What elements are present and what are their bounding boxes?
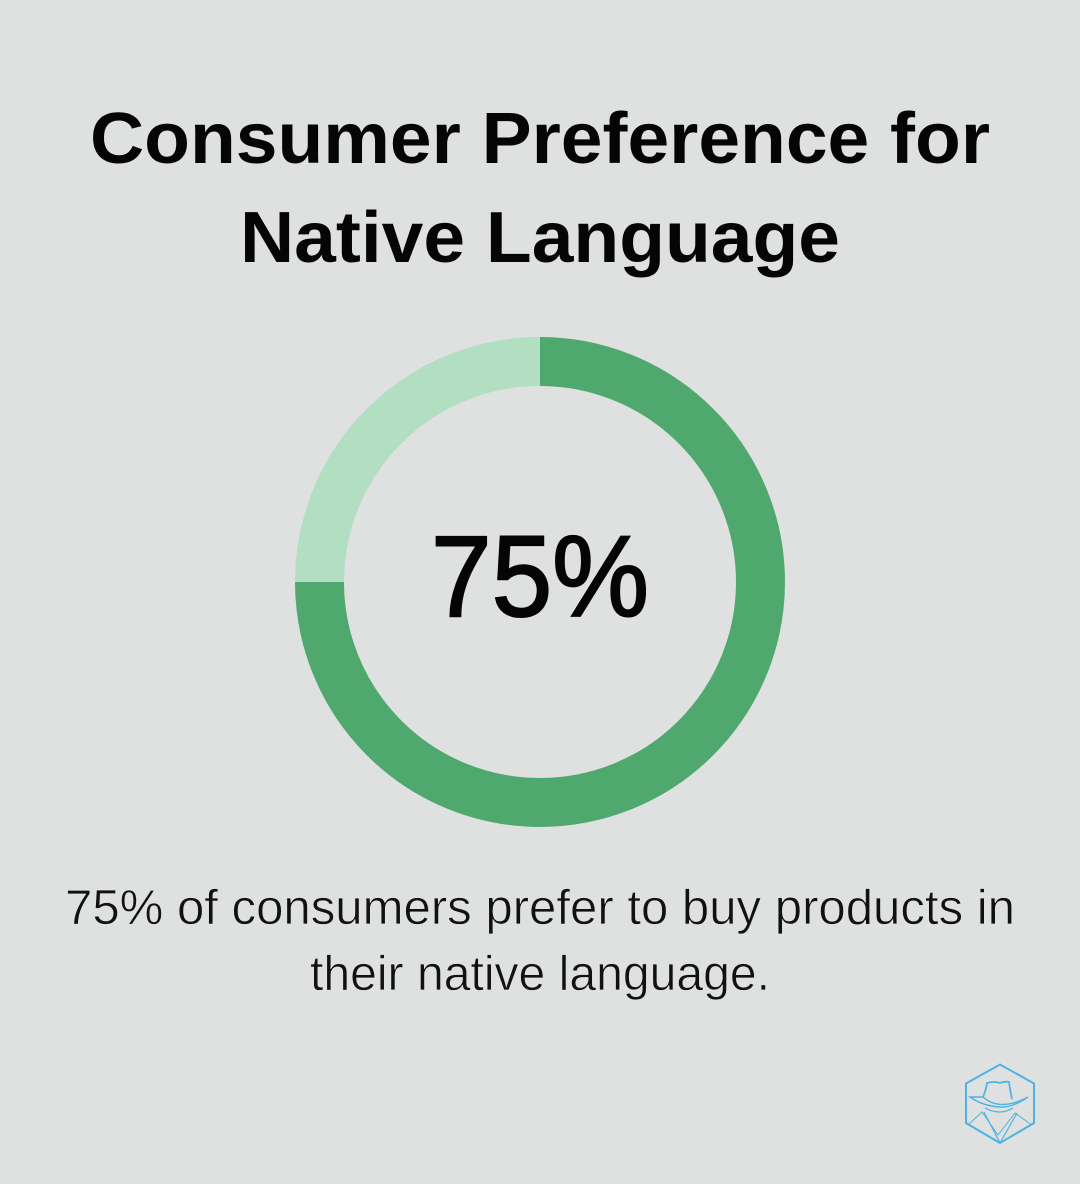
title	[90, 99, 990, 278]
description text	[65, 881, 1015, 1001]
75% segment	[320, 362, 760, 802]
donut chart: 75%	[320, 362, 760, 802]
center value: 75%	[431, 513, 649, 641]
title: Native Language	[240, 198, 840, 278]
title: Consumer Preference for	[90, 99, 990, 179]
remaining 25% segment	[320, 362, 540, 582]
description text: their native language.	[310, 947, 770, 1001]
icon: logo hexagon with spy hat	[966, 1064, 1034, 1143]
description text: 75% of consumers prefer to buy products in	[65, 881, 1015, 935]
